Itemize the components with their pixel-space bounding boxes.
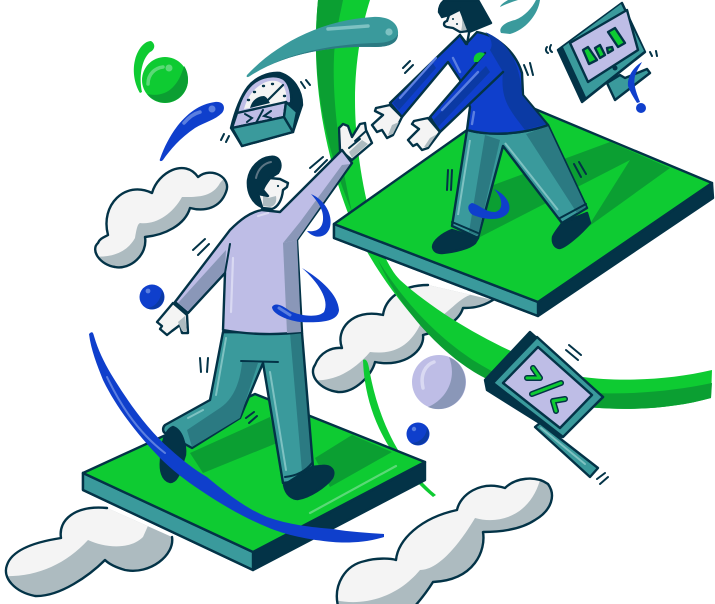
woman back hand [372, 105, 402, 138]
icon: monitor with bar chart [558, 3, 650, 113]
woman sweater [390, 32, 548, 134]
man sweater [175, 150, 352, 334]
person: woman [372, 0, 590, 253]
man front foot [284, 466, 333, 499]
blue ball left [140, 284, 164, 310]
cloud: lower right [336, 477, 554, 604]
upper platform [334, 99, 713, 316]
man front trouser leg [240, 333, 313, 483]
motion dashes [193, 45, 657, 484]
big green ribbon [316, 0, 712, 409]
tablet handle [535, 423, 598, 477]
teal swirl near woman's head [500, 0, 540, 34]
big blue swoosh [89, 332, 384, 542]
woman hair and face [439, 0, 491, 32]
man head [248, 157, 288, 209]
cloud: upper left [94, 166, 228, 269]
blue comet [160, 102, 224, 161]
man back trouser leg and cuff [163, 332, 302, 448]
man lower hand [157, 303, 188, 335]
green ball [142, 57, 188, 103]
lilac ball [412, 355, 466, 409]
teal comet [247, 17, 398, 77]
person: man [157, 123, 372, 499]
blue ball right [406, 422, 430, 446]
cloud: lower left [0, 500, 172, 596]
icon: speed gauge [231, 73, 302, 146]
man back foot [161, 427, 185, 482]
cloud: centre [312, 284, 494, 394]
green comet [134, 41, 154, 93]
blue swirl near woman's leg [468, 189, 509, 219]
thin green swoosh [363, 359, 436, 497]
woman front hand [408, 118, 440, 150]
blue swirl near man's waist [272, 268, 339, 322]
woman shoes [433, 213, 590, 253]
icon: tablet with code symbols [485, 332, 603, 477]
blue swirl near man's raised arm [307, 194, 331, 237]
blue question mark accent [628, 62, 646, 113]
man hand raised [339, 123, 372, 160]
woman trousers [452, 125, 587, 238]
lower platform [83, 394, 425, 570]
